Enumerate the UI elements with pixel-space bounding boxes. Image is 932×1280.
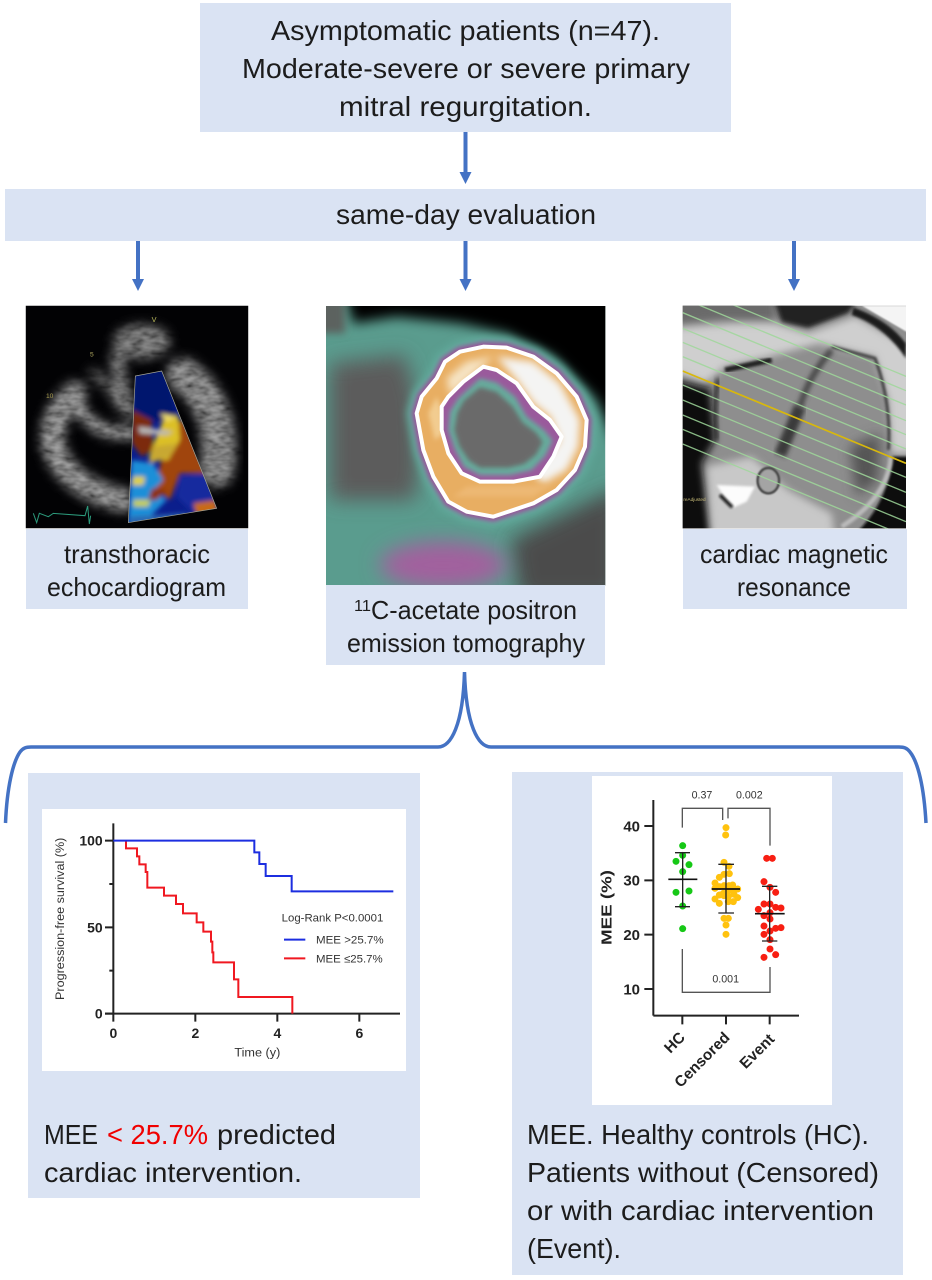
panel: MEE groups result [512, 772, 903, 1275]
chart: MEE scatter by group: 10 [623, 981, 640, 998]
chart: Kaplan-Meier progression-free survival: 100 [79, 833, 103, 849]
chart: Kaplan-Meier progression-free survival: MEE >25.7% [316, 935, 384, 947]
chart: Kaplan-Meier progression-free survival: Progression-free survival (%) [53, 838, 67, 1000]
box: patient population: Asymptomatic patients (n=47). [271, 15, 660, 46]
image: PET scan [326, 306, 606, 586]
box: patient population: mitral regurgitation. [339, 91, 592, 122]
image: cardiac MRI: reAdjusted [683, 497, 706, 502]
label: CMR: resonance [737, 572, 851, 602]
chart: MEE scatter by group: 0.001 [712, 973, 739, 985]
box: patient population [200, 3, 731, 132]
chart: Kaplan-Meier progression-free survival: Time (y) [234, 1045, 280, 1059]
arrow: to cardiac magnetic resonance [788, 241, 800, 291]
panel: transthoracic echocardiogram [26, 306, 248, 609]
chart: MEE scatter by group: HC [661, 1029, 689, 1057]
box: same-day evaluation: same-day evaluation [336, 199, 596, 230]
chart: Kaplan-Meier progression-free survival: 4 [273, 1025, 281, 1041]
chart: Kaplan-Meier progression-free survival: 0 [95, 1006, 103, 1022]
text: MEE groups description [527, 1119, 879, 1264]
chart: MEE scatter by group: 30 [623, 873, 640, 890]
text: survival finding: predicted [217, 1119, 336, 1150]
image: echocardiogram [26, 306, 248, 528]
image: cardiac MRI [682, 306, 906, 528]
chart: Kaplan-Meier progression-free survival: 0 [109, 1025, 117, 1041]
label: echocardiogram [26, 529, 248, 609]
chart: MEE scatter by group: MEE (%) [598, 870, 615, 945]
label: echocardiogram: transthoracic [64, 539, 210, 569]
text: MEE groups description: (Event). [527, 1233, 621, 1264]
text: survival finding [44, 1119, 336, 1188]
arrow: to PET [460, 241, 472, 291]
chart: Kaplan-Meier progression-free survival: Log-Rank P<0.0001 [282, 912, 383, 924]
chart: MEE scatter by group: 0.37 [692, 790, 712, 802]
panel: 11C-acetate PET [326, 306, 606, 665]
text: MEE groups description: or with cardiac intervention [527, 1195, 874, 1226]
chart: MEE scatter by group: Event [737, 1031, 778, 1072]
chart: MEE scatter by group: 20 [623, 927, 640, 944]
box: patient population: Moderate-severe or severe primary [242, 53, 690, 84]
image: echocardiogram: 10 [46, 393, 54, 400]
chart: MEE scatter by group: 0.002 [736, 790, 763, 802]
label: echocardiogram: echocardiogram [47, 572, 226, 602]
text: MEE groups description: MEE. Healthy controls (HC). [527, 1119, 869, 1150]
text: survival finding: cardiac intervention. [44, 1157, 302, 1188]
label: PET: 11 [354, 598, 371, 615]
chart: Kaplan-Meier progression-free survival [42, 809, 406, 1071]
chart: MEE scatter by group: 40 [623, 818, 640, 835]
image: echocardiogram: 5 [90, 352, 94, 359]
label: CMR: cardiac magnetic [700, 539, 888, 569]
chart: Kaplan-Meier progression-free survival: MEE ≤25.7% [316, 953, 383, 965]
brace: PET to results [6, 672, 926, 823]
chart: Kaplan-Meier progression-free survival: 6 [355, 1025, 363, 1041]
panel: cardiac magnetic resonance [682, 306, 907, 609]
image: echocardiogram: V [152, 315, 157, 324]
label: PET [326, 585, 605, 665]
label: CMR [683, 529, 907, 609]
text: survival finding: MEE [44, 1119, 98, 1150]
chart: Kaplan-Meier progression-free survival: 50 [87, 919, 103, 935]
chart: MEE scatter by group [592, 776, 832, 1105]
label: PET: C-acetate positron [371, 595, 577, 625]
chart: Kaplan-Meier progression-free survival: 2 [191, 1025, 199, 1041]
text: MEE groups description: Patients without (Censored) [527, 1157, 879, 1188]
arrow: patients to evaluation [460, 132, 472, 184]
arrow: to echocardiogram [132, 241, 144, 291]
chart: MEE scatter by group: Censored [671, 1029, 733, 1091]
text: survival finding: < 25.7% [107, 1119, 208, 1150]
panel: survival result [28, 773, 420, 1198]
box: same-day evaluation [5, 189, 926, 241]
label: PET: emission tomography [347, 628, 585, 658]
